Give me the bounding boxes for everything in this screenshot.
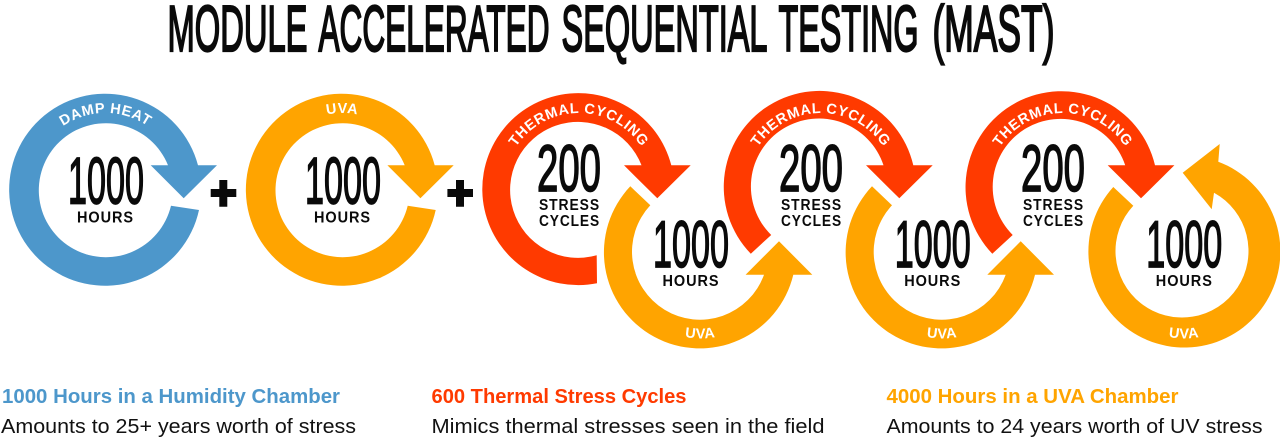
text block: thermal stress cycles: Mimics thermal stresses seen in the field <box>432 416 824 438</box>
arrow: thermal cycling 2: THERMAL CYCLING <box>750 103 890 145</box>
arrow: UVA 1000 hours <box>246 94 454 286</box>
arrow: thermal cycling 1: 200 <box>537 131 601 205</box>
arrow: thermal cycling 3 <box>966 91 1174 254</box>
arrow: thermal cycling 3: THERMAL CYCLING <box>992 103 1132 145</box>
arrow: UVA 1000 hours: UVA <box>326 103 357 114</box>
arrow: thermal cycling 2: STRESS <box>781 197 842 214</box>
arrow: UVA lower 1: UVA <box>686 327 715 338</box>
text block: UVA chamber: 4000 Hours in a UVA Chamber <box>886 386 1179 408</box>
text block: thermal stress cycles: 600 Thermal Stress Cycles <box>432 386 686 408</box>
arrow: UVA lower 1 <box>604 186 812 348</box>
arrow: UVA final: UVA <box>1170 327 1198 338</box>
arrow: thermal cycling 2 <box>724 90 933 254</box>
arrow: UVA final: HOURS <box>1156 273 1213 290</box>
arrow: thermal cycling 2: CYCLES <box>781 213 842 230</box>
arrow: thermal cycling 1: CYCLES <box>539 213 600 230</box>
arrow: thermal cycling 1: THERMAL CYCLING <box>508 103 648 145</box>
text block: humidity chamber: Amounts to 25+ years worth of stress <box>1 416 356 438</box>
arrow: UVA lower 2: HOURS <box>904 273 961 290</box>
arrow: damp heat 1000 hours <box>9 94 217 286</box>
arrow: UVA 1000 hours: HOURS <box>314 210 371 227</box>
arrow: thermal cycling 3: CYCLES <box>1023 213 1084 230</box>
arrow: UVA lower 2: 1000 <box>895 207 971 281</box>
arrow: thermal cycling 3: 200 <box>1021 131 1085 205</box>
text block: UVA chamber: Amounts to 24 years worth of UV stress <box>886 416 1262 438</box>
arrow: thermal cycling 3: STRESS <box>1023 197 1084 214</box>
arrow: UVA final <box>1088 144 1280 348</box>
arrow: thermal cycling 2: 200 <box>779 131 843 205</box>
arrow: UVA lower 2 <box>846 186 1054 348</box>
text block: thermal stress cycles <box>432 386 824 438</box>
text block: humidity chamber <box>1 386 356 438</box>
title <box>168 0 1054 65</box>
arrow: thermal cycling 1 <box>482 93 691 286</box>
arrow: thermal cycling 1: STRESS <box>539 197 600 214</box>
icon: plus sign <box>211 180 236 207</box>
arrow: damp heat 1000 hours: DAMP HEAT <box>58 103 152 126</box>
arrow: UVA lower 1: 1000 <box>653 207 729 281</box>
text block: humidity chamber: 1000 Hours in a Humidity Chamber <box>2 386 340 408</box>
text block: UVA chamber <box>886 386 1262 438</box>
icon: plus sign <box>447 180 473 207</box>
arrow: UVA 1000 hours: 1000 <box>305 144 381 218</box>
arrow: UVA lower 1: HOURS <box>662 273 720 290</box>
arrow: damp heat 1000 hours: 1000 <box>68 144 144 218</box>
arrow: damp heat 1000 hours: HOURS <box>77 210 134 227</box>
arrow: UVA lower 2: UVA <box>928 327 956 338</box>
